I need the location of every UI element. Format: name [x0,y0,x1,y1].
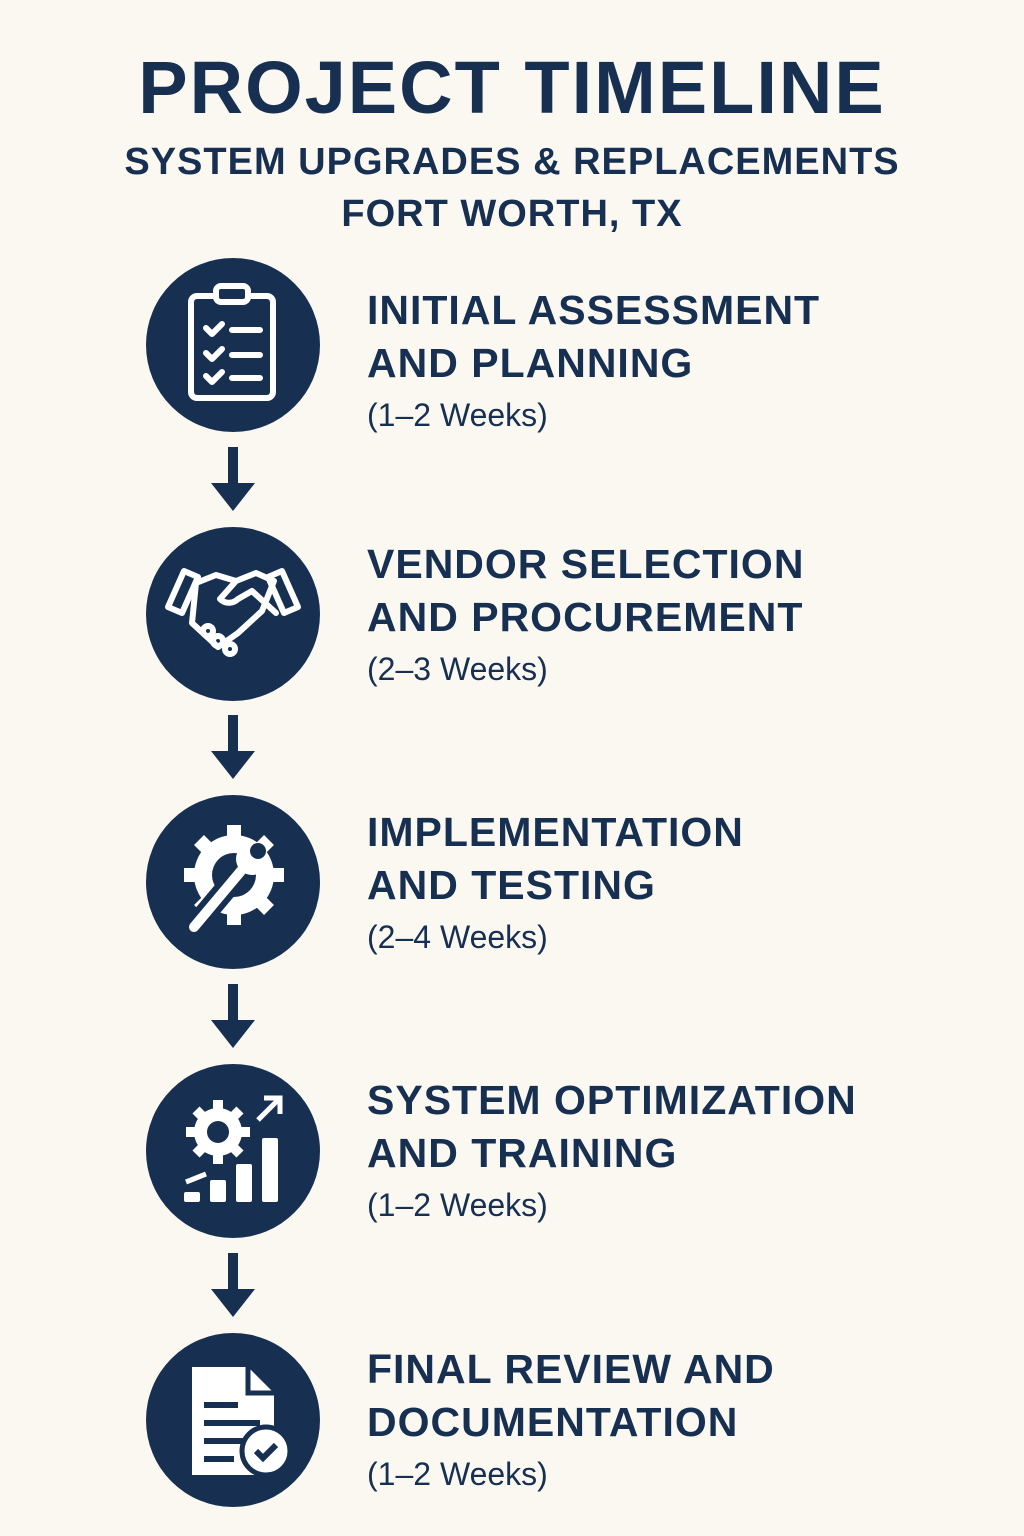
step 3 text: (2–4 Weeks) [367,919,548,955]
title: PROJECT TIMELINE [138,46,886,129]
step 4 text: (1–2 Weeks) [367,1187,548,1223]
arrow 4 [211,1253,255,1317]
arrow 1 [211,447,255,511]
step 4 text: AND TRAINING [367,1130,677,1176]
step 1 text [367,287,820,433]
step 4 text [367,1077,857,1223]
step 3 text: IMPLEMENTATION [367,809,744,855]
step 2 text: (2–3 Weeks) [367,651,548,687]
icon: gear and bar chart [146,1064,320,1238]
step 5 text: (1–2 Weeks) [367,1456,548,1492]
subtitle: SYSTEM UPGRADES & REPLACEMENTS [124,141,900,183]
step 1 text: AND PLANNING [367,340,693,386]
step 5 text [367,1346,775,1492]
icon: gear and wrench [146,795,320,969]
step 1 text: (1–2 Weeks) [367,397,548,433]
icon: clipboard [146,258,320,432]
step 2 text: AND PROCUREMENT [367,594,803,640]
icon: document with check [146,1333,320,1507]
step 1 text: INITIAL ASSESSMENT [367,287,820,333]
subtitle [124,141,900,235]
step 3 text [367,809,744,955]
step 2 text: VENDOR SELECTION [367,541,804,587]
step 5 text: FINAL REVIEW AND [367,1346,775,1392]
step 3 text: AND TESTING [367,862,656,908]
arrow 3 [211,984,255,1048]
step 2 text [367,541,804,687]
arrow 2 [211,715,255,779]
icon: handshake [146,527,320,701]
step 5 text: DOCUMENTATION [367,1399,738,1445]
subtitle: FORT WORTH, TX [341,193,683,235]
step 4 text: SYSTEM OPTIMIZATION [367,1077,857,1123]
